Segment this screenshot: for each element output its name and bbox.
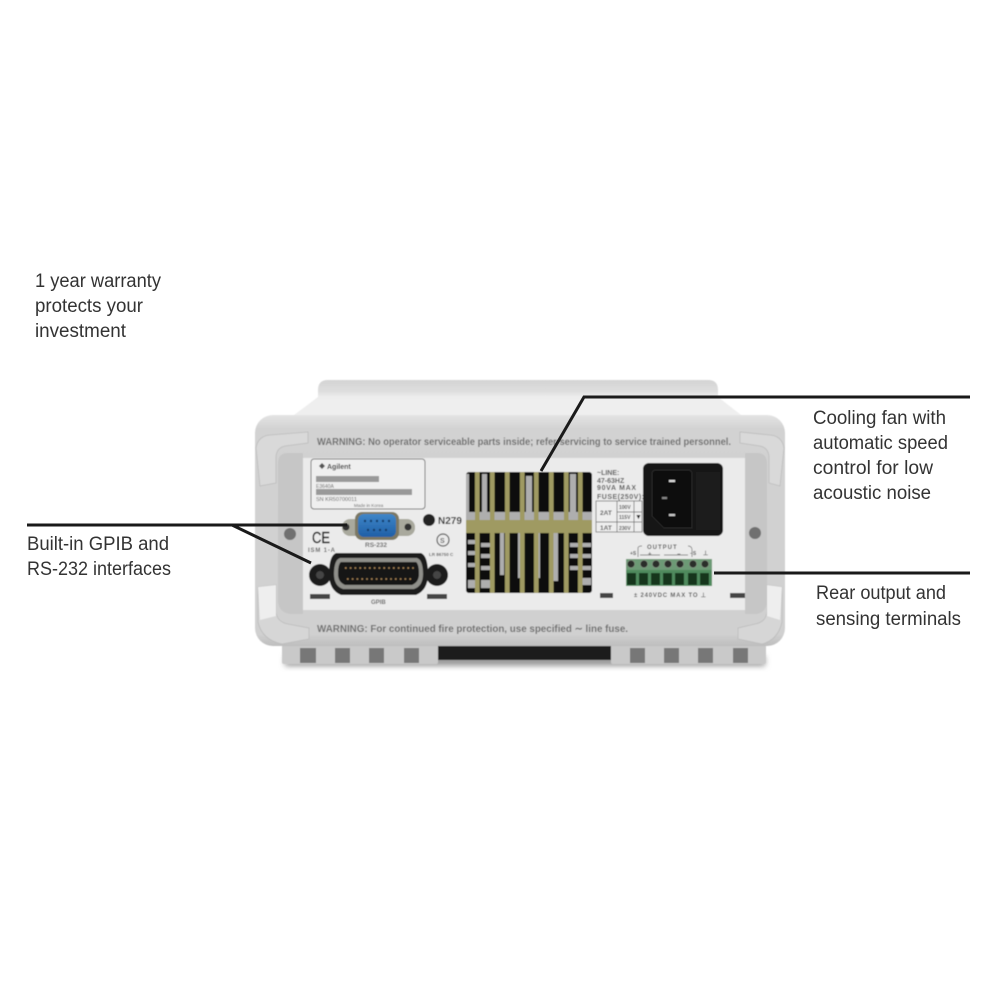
- output label: −: [677, 552, 681, 558]
- CSA mark: [437, 534, 449, 546]
- front bezel: [255, 415, 785, 646]
- text: cooling fan: control for low: [813, 458, 933, 479]
- GPIB label: GPIB: [371, 600, 386, 606]
- line ratings text: FUSE(250V):: [597, 494, 644, 501]
- CE mark: CE: [312, 530, 330, 547]
- output label: OUTPUT: [647, 545, 678, 551]
- left handle bracket: [256, 432, 309, 644]
- serial number label: E3640A: [316, 484, 334, 490]
- panel screw right: [749, 527, 761, 539]
- output label: +: [648, 552, 652, 558]
- foot shadow: [285, 656, 765, 666]
- feet: [282, 644, 766, 664]
- callout line: cooling fan: [541, 397, 970, 471]
- line ratings text: 90VA MAX: [597, 485, 636, 492]
- N279 mark: N279: [438, 516, 462, 527]
- serial number label: Made in Korea: [354, 503, 384, 508]
- text: cooling fan: acoustic noise: [813, 483, 931, 504]
- warning text top: WARNING: No operator serviceable parts inside; refer servicing to service trained personnel.: [317, 436, 731, 448]
- panel screw left: [284, 528, 296, 540]
- output label: ⊥: [703, 550, 708, 557]
- CSA mark: S: [440, 538, 445, 545]
- right handle bracket: [738, 432, 784, 644]
- line ratings text: ~LINE:: [597, 470, 619, 477]
- serial number label: Agilent: [327, 464, 351, 471]
- callout line: interfaces: [27, 525, 347, 563]
- line ratings text: [597, 470, 644, 501]
- text: cooling fan: automatic speed: [813, 433, 948, 454]
- fan grille: [466, 472, 592, 593]
- fuse table: 115V: [619, 515, 631, 521]
- text: interfaces: [27, 534, 171, 580]
- LR label: LR 86750 C: [429, 552, 454, 557]
- text: cooling fan: [813, 408, 948, 504]
- instrument rear view: [255, 380, 785, 666]
- serial number label: [311, 459, 425, 509]
- output label: +S: [630, 551, 637, 557]
- RS-232 label: RS-232: [365, 542, 387, 549]
- top housing: [290, 380, 745, 418]
- fuse table: [596, 501, 642, 532]
- text: warranty: investment: [35, 321, 127, 342]
- output label: [630, 545, 708, 558]
- text: cooling fan: Cooling fan with: [813, 408, 946, 429]
- text: output terminals: [816, 583, 961, 630]
- text: interfaces: Built-in GPIB and: [27, 534, 169, 555]
- fuse table: 230V: [619, 526, 631, 532]
- fuse table: 2AT: [600, 510, 612, 517]
- text: warranty: [35, 271, 161, 342]
- callout line: output terminals: [714, 572, 970, 574]
- GPIB connector: [309, 553, 448, 595]
- ISM label: ISM 1-A: [308, 548, 336, 554]
- text: output terminals: sensing terminals: [816, 609, 961, 630]
- rear panel plate: [303, 458, 745, 610]
- text: interfaces: RS-232 interfaces: [27, 559, 171, 580]
- fuse table: 1AT: [600, 525, 612, 532]
- N279 mark: [423, 514, 462, 527]
- power inlet: [643, 463, 723, 536]
- serial number label: SN KR50700011: [316, 497, 357, 503]
- text: warranty: 1 year warranty: [35, 271, 161, 292]
- text: warranty: protects your: [35, 296, 144, 317]
- text: output terminals: Rear output and: [816, 583, 946, 604]
- RS-232 connector: [342, 512, 415, 540]
- terminal rating label: ± 240VDC MAX TO ⊥: [634, 592, 706, 599]
- fuse table: 100V: [619, 505, 631, 511]
- fuse table: ▼: [635, 514, 642, 521]
- output label: −S: [690, 551, 697, 557]
- slot marks: [310, 593, 745, 599]
- line ratings text: 47-63HZ: [597, 478, 625, 485]
- warning text bottom: WARNING: For continued fire protection, use specified ∼ line fuse.: [317, 623, 628, 635]
- output terminal block: [626, 559, 712, 586]
